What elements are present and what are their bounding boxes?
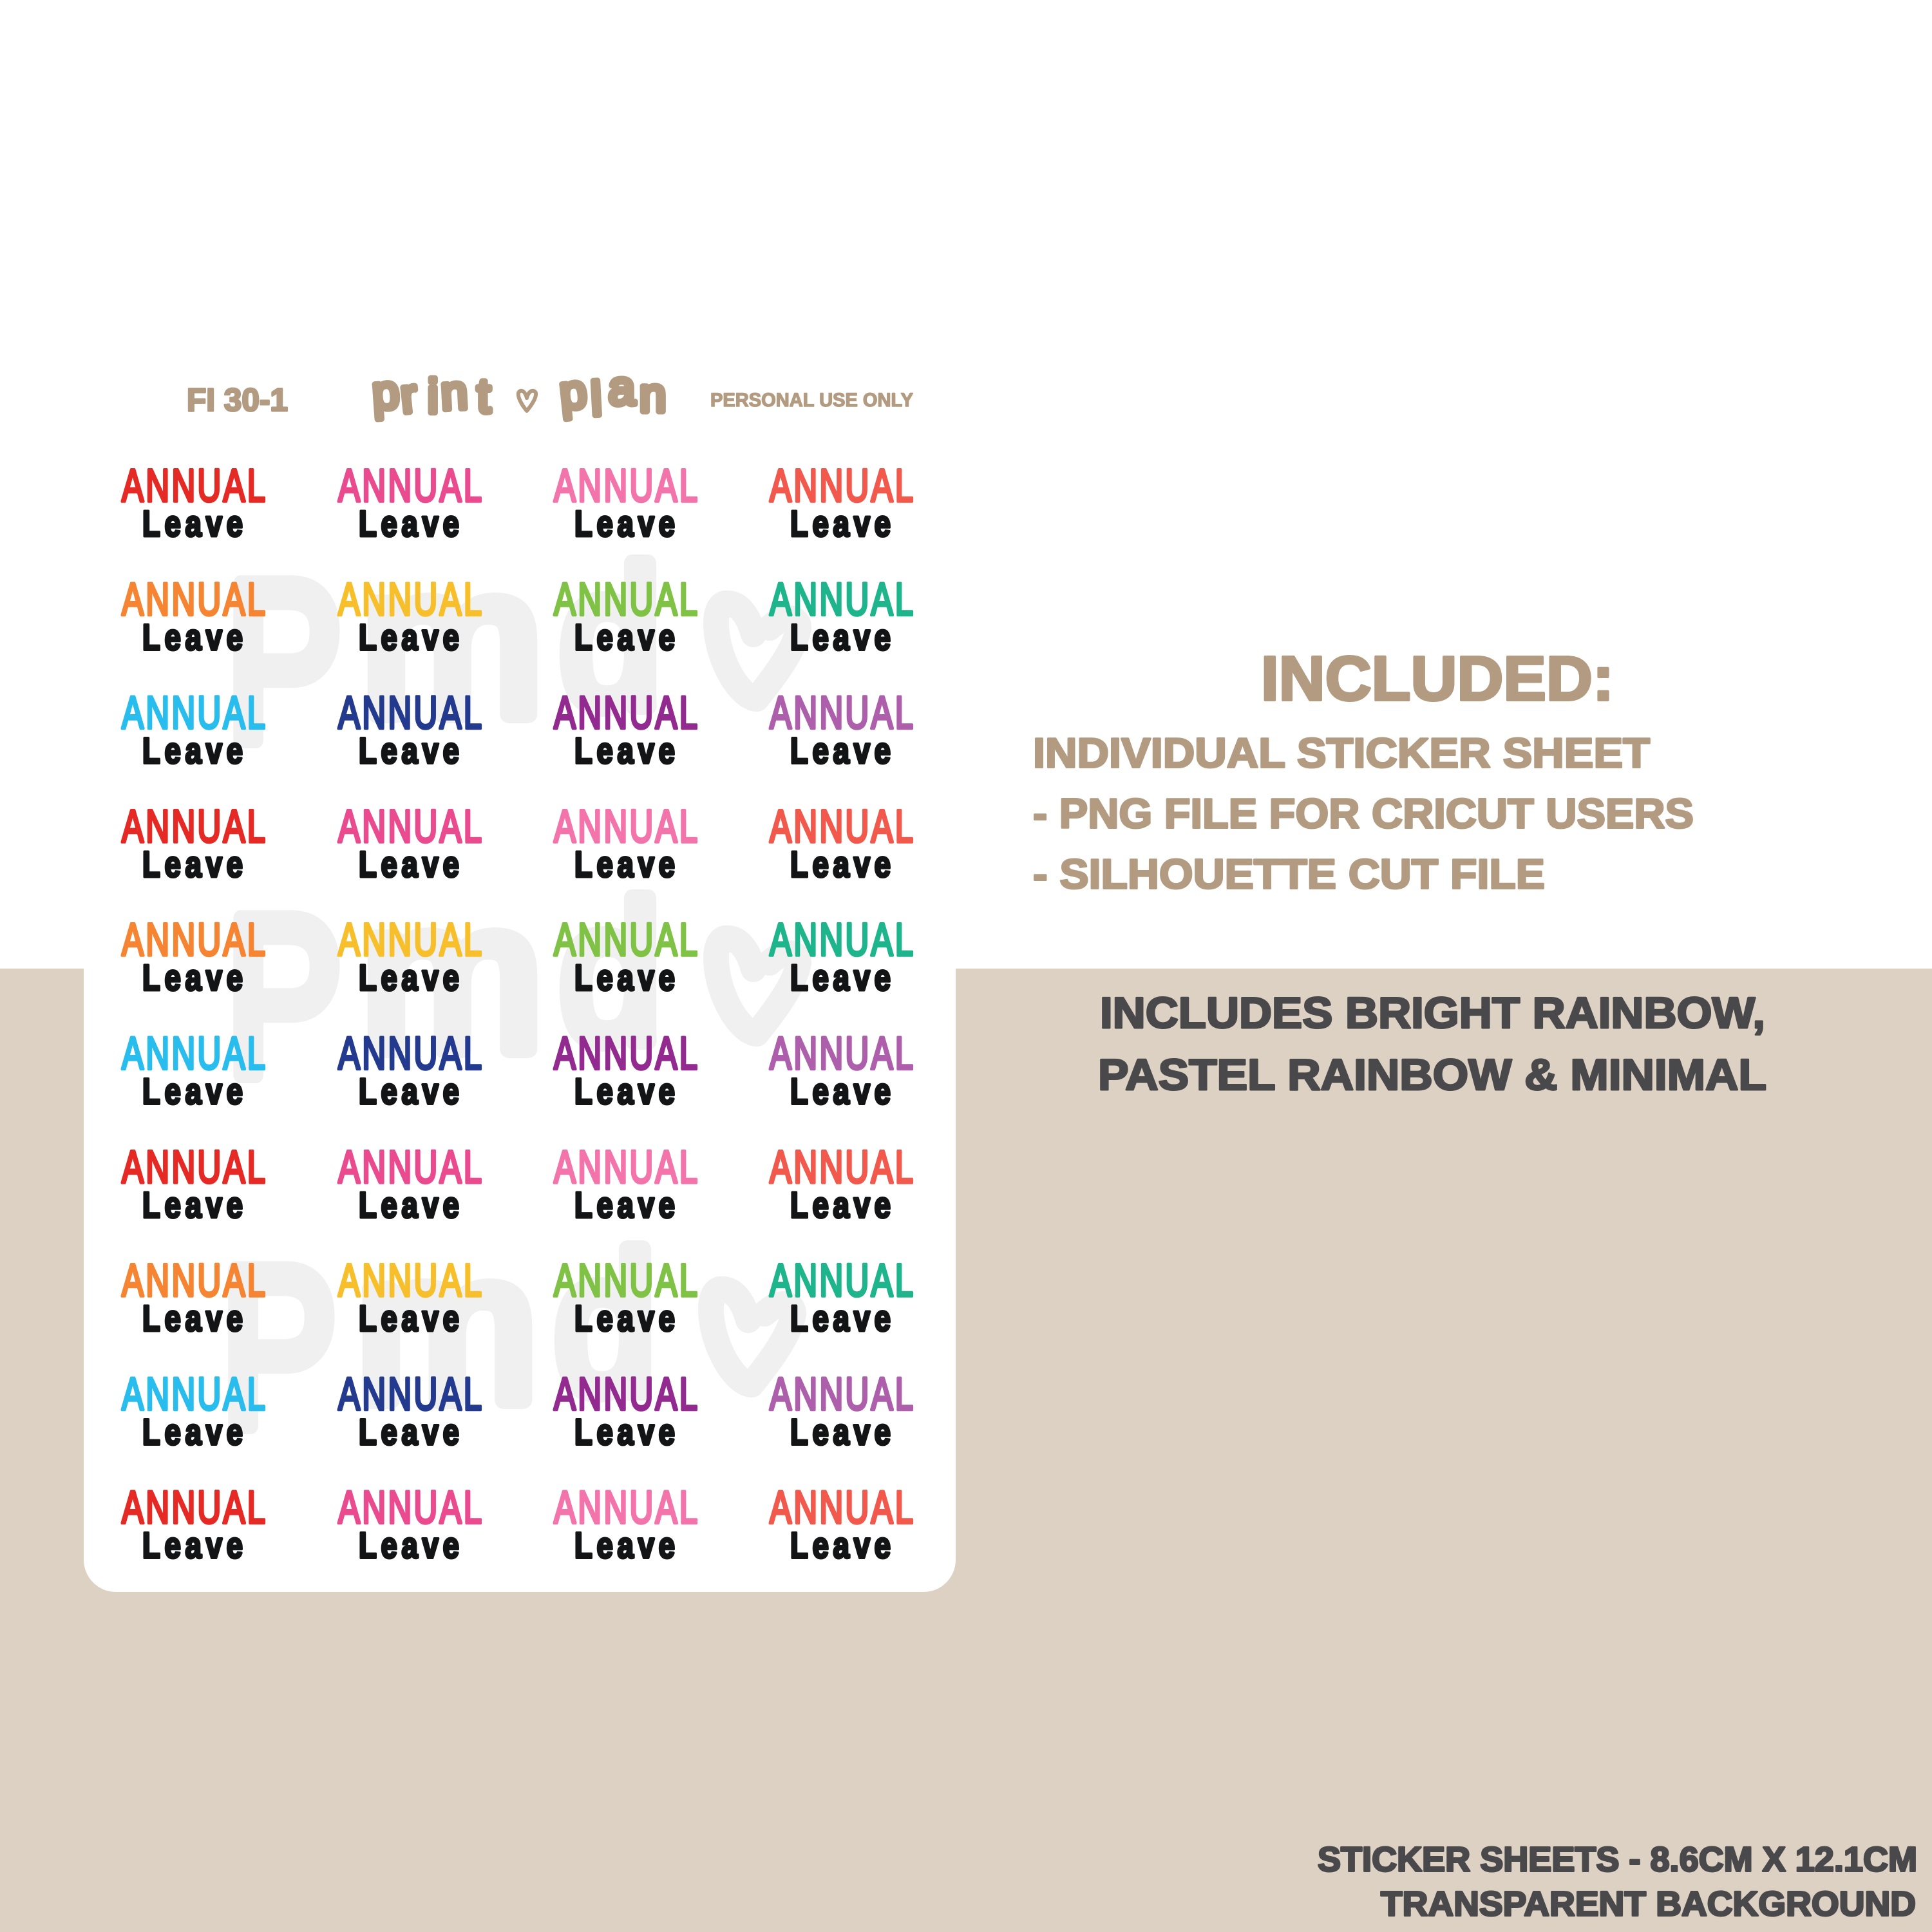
row 6 stickers: ANNUAL	[770, 1028, 913, 1079]
watermark: top: m	[362, 525, 542, 759]
sheet code label: FI 30-1	[187, 382, 288, 418]
watermark: middle	[226, 860, 799, 1122]
beige background band	[0, 969, 1932, 1932]
row 8 stickers: ANNUAL	[770, 1255, 913, 1307]
row 10 stickers: Leave	[359, 1524, 459, 1566]
row 1 stickers: Leave	[574, 503, 675, 544]
text block: included items	[1033, 729, 1694, 898]
watermark: top: d	[560, 528, 660, 748]
row 2 stickers: Leave	[359, 616, 459, 658]
row 3 stickers: ANNUAL	[338, 688, 482, 739]
row 7 stickers: ANNUAL	[554, 1142, 697, 1193]
row 3 stickers: ANNUAL	[770, 688, 913, 739]
row 8 stickers: Leave	[790, 1298, 891, 1339]
row 5 stickers: ANNUAL	[554, 915, 697, 966]
row 10 stickers: ANNUAL	[554, 1482, 697, 1533]
row 4 stickers: Leave	[142, 843, 243, 885]
row 1 stickers: Leave	[359, 503, 459, 544]
watermark: top	[226, 525, 799, 788]
row 8 stickers	[122, 1255, 913, 1339]
row 7 stickers: Leave	[574, 1184, 675, 1225]
row 9 stickers: ANNUAL	[770, 1369, 913, 1420]
row 1 stickers: ANNUAL	[338, 460, 482, 512]
row 7 stickers: ANNUAL	[122, 1142, 265, 1193]
watermark: bottom: d	[555, 1214, 655, 1434]
row 4 stickers: ANNUAL	[554, 801, 697, 852]
row 4 stickers: Leave	[359, 843, 459, 885]
row 5 stickers: Leave	[574, 957, 675, 998]
brand logo: print heart plan: print	[370, 365, 491, 423]
row 2 stickers: Leave	[142, 616, 243, 658]
brand logo: print heart plan: plan	[557, 361, 666, 426]
text block: sheet size	[1318, 1841, 1917, 1923]
row 9 stickers: ANNUAL	[122, 1369, 265, 1420]
row 4 stickers: Leave	[574, 843, 675, 885]
watermark: middle: P	[226, 871, 342, 1122]
row 4 stickers: ANNUAL	[338, 801, 482, 852]
row 6 stickers: ANNUAL	[338, 1028, 482, 1079]
row 3 stickers	[122, 688, 913, 771]
text block: included items: INDIVIDUAL STICKER SHEET	[1033, 729, 1650, 777]
row 8 stickers: ANNUAL	[122, 1255, 265, 1307]
watermark: bottom: m	[357, 1211, 537, 1444]
row 3 stickers: Leave	[790, 730, 891, 771]
row 8 stickers: ANNUAL	[554, 1255, 697, 1307]
row 10 stickers: Leave	[142, 1524, 243, 1566]
row 5 stickers	[122, 915, 913, 998]
row 7 stickers: Leave	[359, 1184, 459, 1225]
watermark: middle: m	[362, 860, 542, 1094]
row 1 stickers: ANNUAL	[554, 460, 697, 512]
row 5 stickers: Leave	[359, 957, 459, 998]
text block: included items: - PNG FILE FOR CRICUT USERS	[1033, 790, 1694, 837]
watermark: bottom	[221, 1211, 793, 1473]
row 2 stickers: ANNUAL	[338, 574, 482, 625]
row 3 stickers: ANNUAL	[554, 688, 697, 739]
row 2 stickers: ANNUAL	[554, 574, 697, 625]
row 6 stickers	[122, 1028, 913, 1112]
watermark: top: P	[226, 536, 342, 788]
panel: sticker sheet	[84, 837, 956, 1592]
row 5 stickers: ANNUAL	[122, 915, 265, 966]
row 4 stickers	[122, 801, 913, 885]
row 5 stickers: ANNUAL	[338, 915, 482, 966]
row 8 stickers: Leave	[574, 1298, 675, 1339]
text block: included items: - SILHOUETTE CUT FILE	[1033, 850, 1545, 898]
brand logo: print heart plan	[370, 361, 666, 426]
row 3 stickers: Leave	[359, 730, 459, 771]
row 9 stickers	[122, 1369, 913, 1452]
row 9 stickers: Leave	[142, 1411, 243, 1452]
row 2 stickers: ANNUAL	[122, 574, 265, 625]
row 2 stickers	[122, 574, 913, 658]
watermark: bottom: P	[221, 1222, 337, 1473]
row 9 stickers: ANNUAL	[338, 1369, 482, 1420]
row 1 stickers: ANNUAL	[770, 460, 913, 512]
row 3 stickers: Leave	[142, 730, 243, 771]
row 2 stickers: Leave	[790, 616, 891, 658]
text block: sheet size: STICKER SHEETS - 8.6CM X 12.1CM	[1318, 1841, 1917, 1879]
row 9 stickers: Leave	[359, 1411, 459, 1452]
row 10 stickers	[122, 1482, 913, 1566]
row 7 stickers: ANNUAL	[338, 1142, 482, 1193]
row 6 stickers: Leave	[359, 1070, 459, 1112]
watermark: middle: d	[560, 863, 660, 1083]
row 9 stickers: Leave	[790, 1411, 891, 1452]
row 10 stickers: ANNUAL	[770, 1482, 913, 1533]
row 8 stickers: Leave	[359, 1298, 459, 1339]
row 4 stickers: ANNUAL	[122, 801, 265, 852]
row 1 stickers: ANNUAL	[122, 460, 265, 512]
text block: colour variants	[1098, 989, 1766, 1099]
row 6 stickers: ANNUAL	[122, 1028, 265, 1079]
row 7 stickers: ANNUAL	[770, 1142, 913, 1193]
row 10 stickers: ANNUAL	[338, 1482, 482, 1533]
row 9 stickers: ANNUAL	[554, 1369, 697, 1420]
row 4 stickers: ANNUAL	[770, 801, 913, 852]
row 6 stickers: ANNUAL	[554, 1028, 697, 1079]
row 2 stickers: ANNUAL	[770, 574, 913, 625]
row 6 stickers: Leave	[142, 1070, 243, 1112]
row 3 stickers: ANNUAL	[122, 688, 265, 739]
row 5 stickers: Leave	[142, 957, 243, 998]
row 2 stickers: Leave	[574, 616, 675, 658]
row 5 stickers: Leave	[790, 957, 891, 998]
row 1 stickers	[122, 460, 913, 544]
row 7 stickers: Leave	[790, 1184, 891, 1225]
row 4 stickers: Leave	[790, 843, 891, 885]
sticker grid	[122, 460, 913, 1566]
row 9 stickers: Leave	[574, 1411, 675, 1452]
row 6 stickers: Leave	[574, 1070, 675, 1112]
row 7 stickers	[122, 1142, 913, 1225]
row 1 stickers: Leave	[142, 503, 243, 544]
row 1 stickers: Leave	[790, 503, 891, 544]
row 10 stickers: Leave	[574, 1524, 675, 1566]
text block: sheet size: TRANSPARENT BACKGROUND	[1381, 1884, 1916, 1923]
usage note: PERSONAL USE ONLY	[710, 390, 913, 411]
row 5 stickers: ANNUAL	[770, 915, 913, 966]
row 6 stickers: Leave	[790, 1070, 891, 1112]
row 3 stickers: Leave	[574, 730, 675, 771]
row 10 stickers: Leave	[790, 1524, 891, 1566]
row 10 stickers: ANNUAL	[122, 1482, 265, 1533]
text block: colour variants: PASTEL RAINBOW & MINIMAL	[1098, 1050, 1766, 1099]
row 8 stickers: ANNUAL	[338, 1255, 482, 1307]
row 7 stickers: Leave	[142, 1184, 243, 1225]
heading: included: INCLUDED:	[1261, 643, 1614, 714]
row 8 stickers: Leave	[142, 1298, 243, 1339]
text block: colour variants: INCLUDES BRIGHT RAINBOW,	[1100, 989, 1765, 1037]
